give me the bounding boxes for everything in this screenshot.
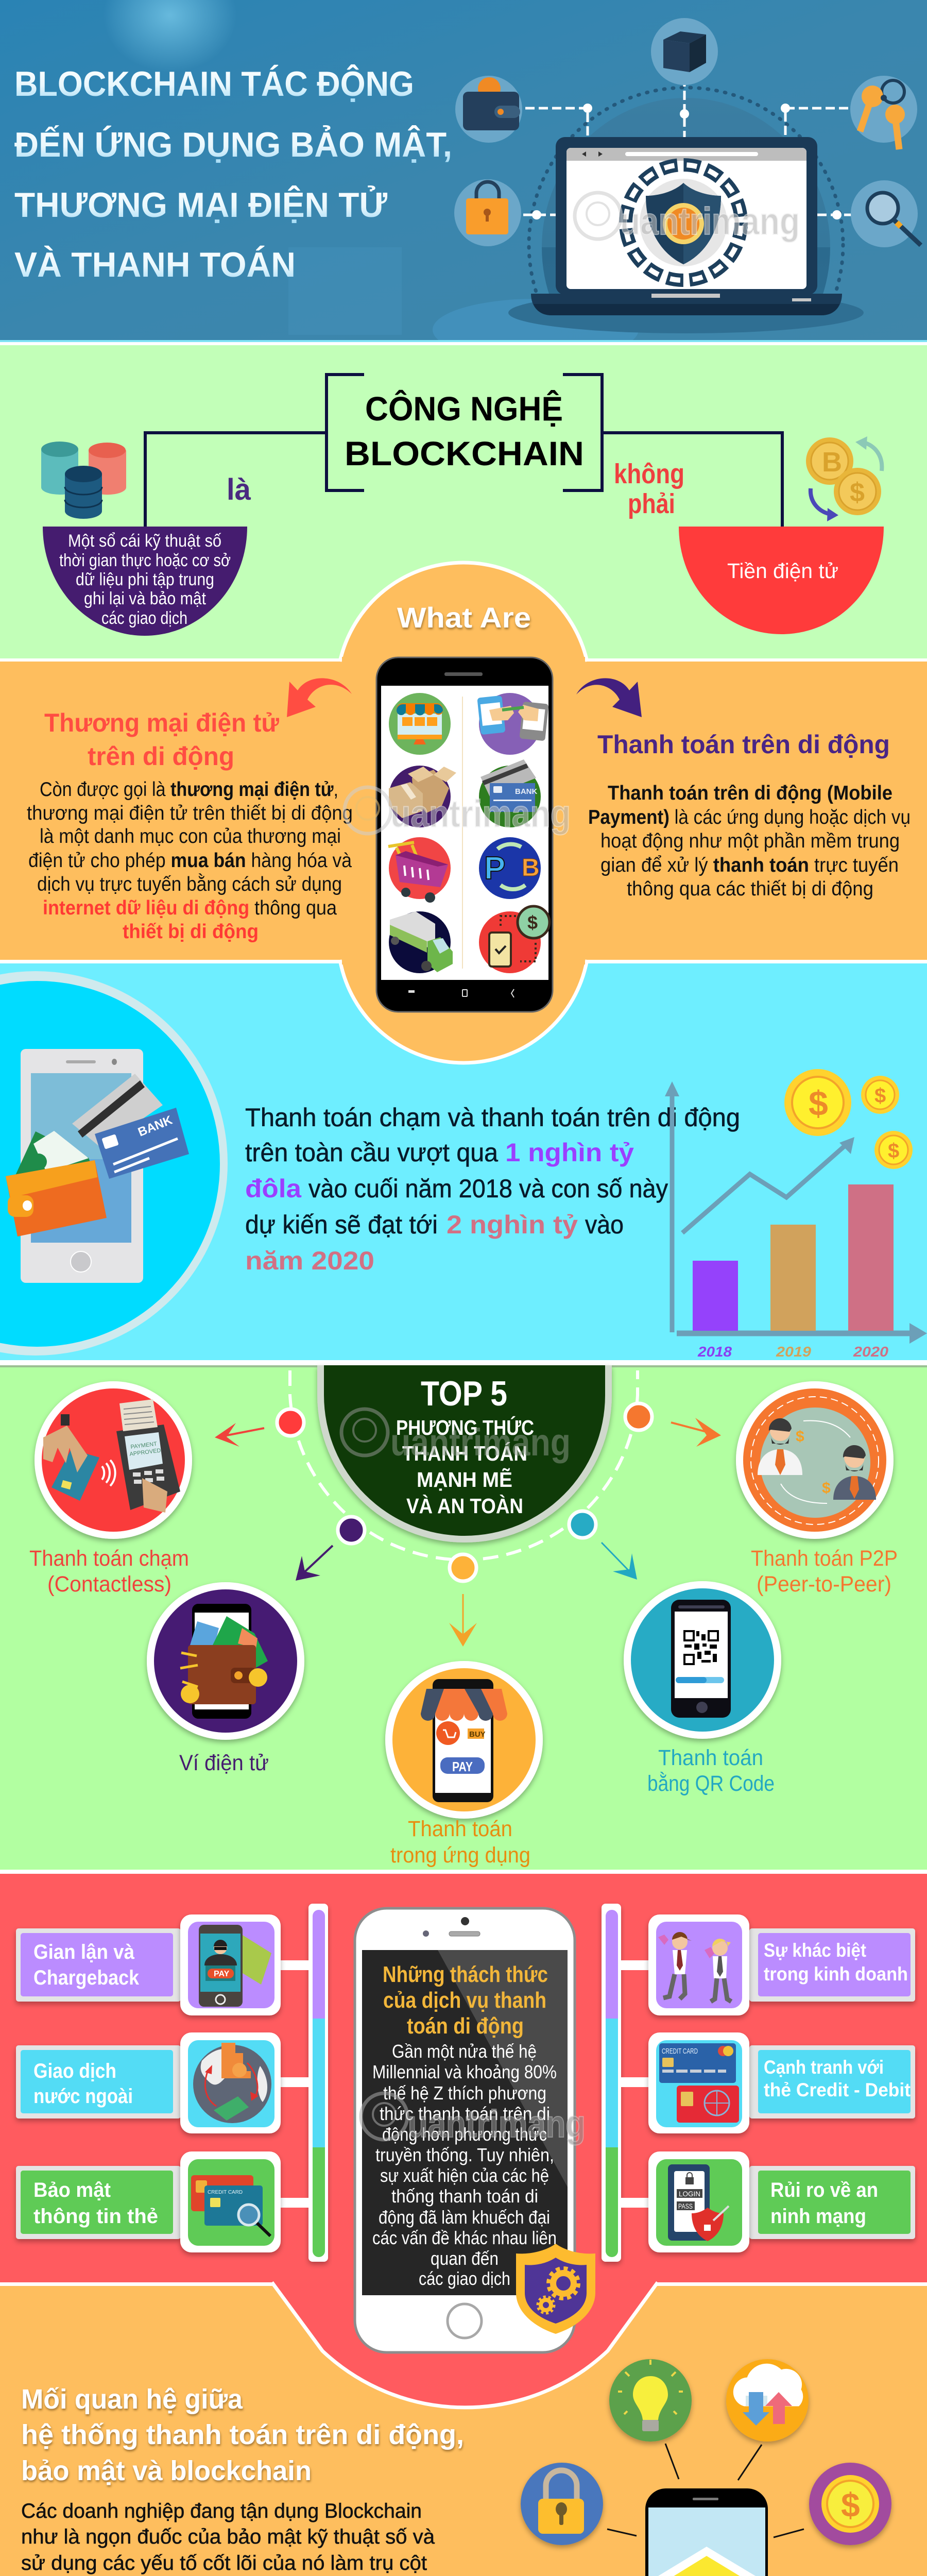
- text: challenges body: thống thanh toán di: [391, 2185, 538, 2207]
- icon: padlock: [521, 2463, 603, 2545]
- panel: top 5 band: [0, 1365, 927, 1874]
- challenge: business differences: Sự khác biệt: [764, 1940, 866, 1961]
- bar chart: 2018 to 2020: 2019: [776, 1344, 811, 1360]
- app icon: mobile payment: [479, 906, 550, 973]
- app icon: store: [389, 693, 451, 755]
- panel: digital ledger: dữ liệu phi tập trung: [76, 570, 214, 589]
- label: contactless payment: Thanh toán chạm: [29, 1546, 189, 1571]
- panel: digital ledger: các giao dịch: [101, 608, 187, 628]
- text: challenges body: [372, 2041, 557, 2289]
- label: QR code payment: [647, 1745, 775, 1796]
- app icon: paypal and bitcoin: B: [522, 854, 540, 882]
- text: mobile commerce: internet dữ liệu di động thông qua: [43, 897, 337, 919]
- icon: gold coins: $: [874, 1084, 886, 1107]
- heading: top 5: TOP 5: [421, 1374, 507, 1413]
- illustration: phone with wallet and cards: [0, 971, 228, 1355]
- challenge: foreign transactions: [16, 2032, 281, 2133]
- arrow: to contactless: [215, 1423, 264, 1447]
- watermark: top 5: uantrimang: [390, 1421, 571, 1464]
- arrow: to in-app: [449, 1594, 477, 1647]
- title: VÀ THANH TOÁN: [14, 245, 296, 284]
- text: payment statistic: 1 nghìn tỷ: [505, 1138, 634, 1167]
- text: mobile commerce: là một danh mục con của thương mại: [40, 825, 341, 848]
- heading: challenges: Những thách thức: [383, 1962, 548, 1987]
- item: in-app payment: BUY: [469, 1730, 486, 1739]
- icon: database stacks: [41, 442, 126, 519]
- arrow: to QR: [602, 1543, 637, 1580]
- illustration: laptop with security chain: [508, 84, 864, 333]
- label: P2P payment: (Peer-to-Peer): [757, 1572, 891, 1597]
- panel: digital ledger: [43, 527, 247, 636]
- app icon: boxes: [389, 766, 456, 827]
- icon: magnifier: [851, 180, 921, 247]
- panel: header background: [0, 0, 927, 361]
- challenge: business differences: [648, 1914, 915, 2015]
- label: không phải: không: [614, 459, 684, 489]
- text: relationship body: [21, 2500, 435, 2576]
- heading: relationship: hệ thống thanh toán trên di động,: [21, 2419, 464, 2450]
- app icon: mobile payment: $: [527, 912, 538, 933]
- watermark: phone icons: uantrimang: [390, 792, 571, 835]
- app icon: paypal and bitcoin: [479, 837, 541, 899]
- challenge: cybersecurity risk: [648, 2151, 915, 2252]
- label: không phải: [614, 459, 684, 519]
- watermark: header: [575, 193, 800, 243]
- heading: top 5: MẠNH MẼ: [417, 1468, 512, 1492]
- challenge: foreign transactions: nước ngoài: [33, 2085, 133, 2108]
- item: P2P payment: $: [796, 1428, 804, 1445]
- watermark: challenges: uantrimang: [408, 2103, 586, 2145]
- panel: mobile commerce and payment band: [0, 662, 927, 963]
- text: mobile payment: Thanh toán trên di động (Mobile: [608, 782, 892, 804]
- phone: blockchain app: [645, 2488, 768, 2576]
- text: mobile commerce: trên di động: [88, 742, 234, 771]
- text: mobile commerce: [27, 708, 353, 943]
- text: payment statistic: [245, 1103, 740, 1275]
- challenge: competition with credit debit: [648, 2032, 915, 2133]
- item: contactless payment: [35, 1381, 192, 1539]
- challenge: cybersecurity risk: PASS: [678, 2202, 693, 2210]
- challenge: fraud and chargeback: [16, 1914, 281, 2015]
- panel: what is blockchain: [0, 345, 927, 662]
- icon: padlock: [454, 179, 521, 246]
- heading: công nghệ blockchain: BLOCKCHAIN: [345, 434, 584, 472]
- panel: challenges band: [0, 1874, 927, 2576]
- icon: gold coins: $: [888, 1140, 899, 1162]
- icon: coins with arrows: $: [850, 478, 865, 507]
- app icon: delivery truck: [389, 911, 453, 973]
- text: challenges body: Gần một nửa thế hệ: [392, 2041, 537, 2062]
- label: QR code payment: Thanh toán: [658, 1745, 763, 1770]
- timeline bar: left: [308, 1904, 328, 2262]
- icon: cube: [651, 18, 718, 85]
- text: relationship body: Các doanh nghiệp đang tận dụng Blockchain: [21, 2500, 422, 2522]
- icon: dollar coin: [809, 2463, 891, 2545]
- panel: what are lens: [340, 563, 587, 1063]
- item: QR code payment: [624, 1581, 781, 1739]
- title: [14, 64, 452, 284]
- text: relationship body: như là ngọn đuốc của bảo mật kỹ thuật số và: [21, 2526, 435, 2548]
- label: contactless payment: [29, 1546, 189, 1597]
- text: challenges body: các giao dịch: [419, 2268, 510, 2289]
- heading: relationship: [21, 2384, 464, 2486]
- text: payment statistic: dự kiến sẽ đạt tới: [245, 1210, 438, 1239]
- label: QR code payment: bằng QR Code: [647, 1771, 775, 1796]
- text: mobile payment: hoạt động như một phần mềm trung: [600, 830, 900, 852]
- app icon: bank cards: BANK: [515, 787, 537, 796]
- watermark: challenges: [361, 2093, 586, 2145]
- panel: not cryptocurrency: Tiền điện tử: [727, 559, 838, 583]
- panel: digital ledger: ghi lại và bảo mật: [84, 589, 206, 608]
- text: challenges body: động đã làm khuếch đại: [379, 2207, 550, 2228]
- text: challenges body: thức thanh toán trên di: [380, 2103, 550, 2124]
- panel: digital ledger: thời gian thực hoặc cơ sở: [59, 551, 231, 570]
- dashed ring connector: [290, 1370, 638, 1560]
- text: mobile payment: gian để xử lý thanh toán trực tuyến: [600, 854, 899, 876]
- arrow: to P2P: [671, 1418, 721, 1447]
- challenge: business differences: trong kinh doanh: [764, 1963, 908, 1985]
- item: in-app payment: PAY: [452, 1759, 473, 1774]
- connectors to bars: [281, 1960, 649, 2208]
- text: mobile payment: thông qua các thiết bị di động: [627, 878, 873, 900]
- label: không phải: phải: [628, 488, 675, 519]
- panel: not cryptocurrency: [679, 527, 884, 634]
- icon: light bulb: [609, 2359, 692, 2442]
- phone with app icons: [376, 657, 553, 1012]
- challenge: card information security: CREDIT CARD: [208, 2190, 243, 2195]
- title: BLOCKCHAIN TÁC ĐỘNG: [14, 64, 414, 104]
- heading: top 5: [317, 1365, 612, 1543]
- heading: top 5: VÀ AN TOÀN: [406, 1494, 523, 1518]
- heading: what are: What Are: [397, 601, 531, 634]
- heading: công nghệ blockchain: [327, 375, 602, 490]
- label: in-app payment: [390, 1817, 530, 1868]
- heading: công nghệ blockchain: CÔNG NGHỆ: [365, 389, 563, 428]
- panel: blue statistics band: [0, 963, 927, 1365]
- icon: dollar coin: $: [841, 2486, 860, 2524]
- challenge: cybersecurity risk: Rủi ro về an: [770, 2179, 878, 2201]
- icon: gear shield: [516, 2244, 595, 2334]
- connector lines to phone: [607, 2444, 815, 2576]
- app icon: bank cards: [479, 759, 541, 827]
- watermark: phone icons: [345, 787, 571, 835]
- illustration: phone with wallet and cards: BANK: [136, 1113, 175, 1140]
- phone: challenges of mobile payment: [355, 1908, 575, 2352]
- text: mobile commerce: Còn được gọi là thương mại điện tử,: [40, 778, 338, 801]
- icon: cloud sync: [726, 2359, 809, 2442]
- text: challenges body: truyền thống. Tuy nhiên,: [375, 2144, 554, 2165]
- ring nodes: [277, 1403, 652, 1581]
- app icon: shopping basket: [388, 837, 451, 903]
- item: in-app payment: [385, 1661, 543, 1819]
- challenge: competition with credit debit: thẻ Credit - Debit: [764, 2079, 911, 2100]
- text: challenges body: các vấn đề khác nhau liên: [372, 2227, 557, 2248]
- text: payment statistic: vào: [585, 1210, 624, 1239]
- challenge: fraud and chargeback: PAY: [214, 1970, 230, 1978]
- text: payment statistic: Thanh toán chạm và thanh toán trên di động: [245, 1103, 740, 1132]
- text: payment statistic: năm 2020: [245, 1246, 374, 1275]
- arrow: to mobile commerce: [287, 678, 352, 717]
- item: P2P payment: $: [822, 1480, 831, 1497]
- label: contactless payment: (Contactless): [47, 1572, 171, 1597]
- heading: top 5: PHƯƠNG THỨC: [396, 1416, 534, 1439]
- heading: challenges: toán di động: [407, 2013, 524, 2039]
- timeline bar: right: [602, 1904, 621, 2262]
- text: mobile commerce: thiết bị di động: [123, 921, 259, 943]
- heading: challenges: của dịch vụ thanh: [383, 1988, 546, 2013]
- icon: wallet: [455, 76, 522, 143]
- challenge: card information security: [16, 2151, 281, 2252]
- challenge: competition with credit debit: CREDIT CARD: [662, 2047, 698, 2056]
- panel: digital ledger: Một sổ cái kỹ thuật số: [68, 531, 221, 551]
- item: contactless payment: PAYMENT: [130, 1441, 158, 1450]
- label: in-app payment: Thanh toán: [408, 1817, 512, 1841]
- arrow: to mobile payment: [576, 678, 642, 717]
- label: P2P payment: [751, 1546, 898, 1597]
- icon: coins with arrows: B: [822, 447, 842, 478]
- text: challenges body: quan đến: [431, 2248, 499, 2269]
- text: payment statistic: 2 nghìn tỷ: [447, 1210, 578, 1239]
- heading: challenges: [383, 1962, 548, 2039]
- bar chart: 2018 to 2020: 2020: [853, 1344, 888, 1360]
- text: payment statistic: vào cuối năm 2018 và con số này: [308, 1174, 668, 1203]
- watermark: header: uantrimang: [620, 200, 800, 243]
- text: relationship body: sử dụng các yếu tố cốt lõi của nó làm trụ cột: [21, 2552, 427, 2574]
- text: challenges body: thế hệ Z thích phương: [383, 2082, 546, 2104]
- label: in-app payment: trong ứng dụng: [390, 1843, 530, 1868]
- challenge: card information security: Bảo mật: [33, 2179, 111, 2201]
- challenge: fraud and chargeback: Chargeback: [33, 1967, 140, 1989]
- connectors from heading: [145, 433, 782, 527]
- text: challenges body: sự xuất hiện của các hệ: [380, 2165, 549, 2186]
- challenge: foreign transactions: Giao dịch: [33, 2060, 116, 2082]
- text: mobile commerce: Thương mại điện tử: [44, 708, 280, 737]
- heading: top 5: THANH TOÁN: [402, 1442, 527, 1465]
- icon: gold coins: [784, 1069, 913, 1169]
- app icon: hands exchanging: [477, 693, 549, 755]
- bar chart: 2018 to 2020: [665, 1081, 927, 1360]
- text: challenges body: Millennial và khoảng 80%: [372, 2061, 557, 2082]
- title: ĐẾN ỨNG DỤNG BẢO MẬT,: [14, 125, 452, 164]
- arrow: to wallet: [296, 1546, 333, 1581]
- text: challenges body: động hơn phương thức: [382, 2124, 547, 2145]
- label: P2P payment: Thanh toán P2P: [751, 1546, 898, 1571]
- watermark: top 5: [341, 1409, 571, 1464]
- item: contactless payment: APPROVED: [129, 1448, 161, 1458]
- heading: relationship: bảo mật và blockchain: [21, 2455, 312, 2486]
- text: payment statistic: trên toàn cầu vượt qua: [245, 1138, 498, 1167]
- bar chart: 2018 to 2020: 2018: [697, 1344, 732, 1360]
- label: e-wallet: Ví điện tử: [179, 1751, 269, 1775]
- app icon: paypal and bitcoin: P: [484, 851, 505, 886]
- text: payment statistic: đôla: [245, 1174, 302, 1203]
- challenge: cybersecurity risk: LOGIN: [679, 2190, 700, 2198]
- text: mobile payment: Thanh toán trên di động: [597, 730, 890, 759]
- challenge: card information security: thông tin thẻ: [33, 2205, 158, 2228]
- label: là: là: [227, 473, 251, 506]
- challenge: cybersecurity risk: ninh mạng: [770, 2205, 866, 2228]
- text: mobile commerce: điện tử cho phép mua bán hàng hóa và: [28, 850, 352, 872]
- title: THƯƠNG MẠI ĐIỆN TỬ: [14, 185, 388, 225]
- text: mobile commerce: thương mại điện tử trên thiết bị di động: [27, 802, 353, 824]
- text: mobile commerce: dịch vụ trực tuyến bằng cách sử dụng: [37, 873, 342, 895]
- item: e-wallet: [147, 1582, 304, 1740]
- icon: keys: [850, 76, 917, 149]
- item: P2P payment: [736, 1381, 894, 1539]
- heading: relationship: Mối quan hệ giữa: [21, 2384, 243, 2415]
- icon: coins with arrows: [806, 436, 882, 521]
- icon: gold coins: $: [809, 1084, 828, 1123]
- challenge: competition with credit debit: Cạnh tranh với: [764, 2057, 884, 2078]
- challenge: fraud and chargeback: Gian lận và: [33, 1941, 135, 1963]
- text: mobile payment: [588, 730, 911, 900]
